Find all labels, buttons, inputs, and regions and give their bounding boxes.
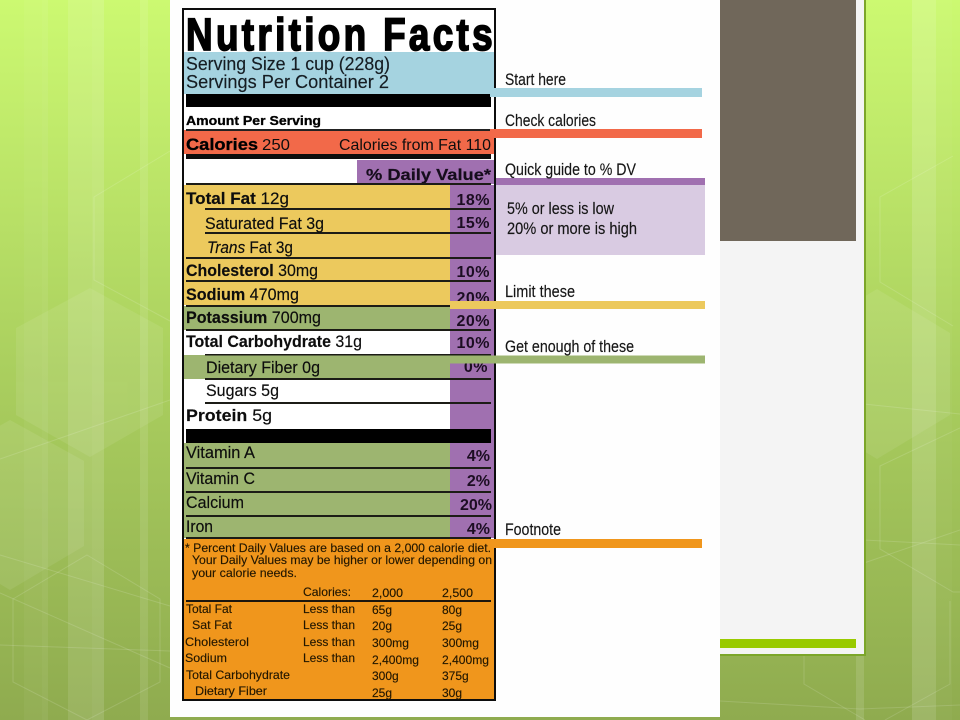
nutrient rows: Dietary Fiber 0g (206, 359, 320, 377)
callout: get enough of these (450, 337, 705, 364)
calories band: Calories from Fat 110 (339, 137, 491, 154)
percent values column: 10% (456, 264, 490, 281)
percent daily value header (357, 160, 494, 184)
percent values column: 0% (464, 359, 488, 376)
black divider bar lower (186, 429, 491, 443)
callout: start here (490, 70, 702, 97)
footnote block: Sodium (185, 651, 227, 665)
content panel (170, 0, 866, 656)
callout: check calories: Check calories (505, 111, 596, 130)
callout: footnote: Footnote (505, 520, 561, 539)
percent values column: 10% (456, 335, 490, 352)
percent values column: 20% (456, 290, 490, 307)
percent values column (456, 192, 492, 538)
nutrient rows: Protein 5g (186, 407, 272, 425)
footnote block: 2,400mg (442, 653, 489, 667)
nutrient rows: Trans Fat 3g (207, 239, 293, 257)
footnote block: 300mg (442, 636, 479, 650)
serving information band (184, 52, 494, 94)
nutrient colour bands (184, 185, 494, 538)
footnote block: * Percent Daily Values are based on a 2,000 calorie diet. (185, 541, 491, 555)
percent values column: 20% (460, 497, 492, 514)
nutrient rows: Total Fat 12g (186, 190, 289, 208)
percent values column: 20% (456, 313, 490, 330)
callout: footnote (494, 520, 702, 548)
footnote block: 300g (372, 669, 399, 683)
nutrient rows: Iron (186, 518, 213, 536)
brown title block (720, 0, 856, 241)
nutrient rows: Cholesterol 30mg (186, 262, 318, 280)
nutrient rows: Saturated Fat 3g (205, 215, 324, 233)
footnote block: 25g (372, 686, 392, 700)
footnote block: Dietary Fiber (195, 684, 267, 698)
footnote block: 300mg (372, 636, 409, 650)
footnote block: 2,500 (442, 586, 473, 600)
nutrient rows: Calcium (186, 494, 244, 512)
percent values column: 15% (456, 215, 490, 232)
serving information band: Servings Per Container 2 (186, 72, 389, 92)
nutrient rows: Total Carbohydrate 31g (186, 333, 362, 351)
calories band: 250 (262, 137, 290, 154)
green accent bar (720, 639, 856, 648)
amount per serving heading: Amount Per Serving (186, 114, 321, 128)
nutrient rows (186, 190, 362, 536)
footnote block: Your Daily Values may be higher or lower depending on (192, 553, 492, 567)
percent values column: 4% (467, 521, 490, 538)
callout: limit these (450, 282, 705, 309)
row rules (186, 183, 491, 539)
calories band: Calories (186, 136, 258, 154)
footnote block: Less than (303, 651, 355, 665)
footnote block: 375g (442, 669, 469, 683)
footnote block: Less than (303, 618, 355, 632)
footnote block: 30g (442, 686, 462, 700)
footnote block: 2,000 (372, 586, 403, 600)
nutrient rows: Vitamin A (186, 444, 255, 462)
footnote block: Cholesterol (185, 635, 249, 649)
percent values column: 2% (467, 473, 490, 490)
callout: quick guide to daily value: 20% or more is high (507, 219, 637, 238)
nutrient rows: Sugars 5g (206, 382, 279, 400)
calories band (184, 129, 494, 159)
footnote block: Total Carbohydrate (186, 668, 290, 682)
callout: start here: Start here (505, 70, 566, 89)
footnote block: your calorie needs. (192, 566, 297, 580)
percent values column: 4% (467, 448, 490, 465)
footnote block: Calories: (303, 585, 351, 599)
title: Nutrition Facts: Nutrition Facts (186, 10, 493, 60)
footnote block (184, 539, 494, 700)
black divider bar (186, 94, 491, 107)
footnote block: Sat Fat (192, 618, 233, 632)
nutrition facts label (183, 9, 705, 700)
callout: quick guide to daily value (496, 160, 705, 255)
footnote block: 2,400mg (372, 653, 419, 667)
footnote block: Total Fat (186, 602, 233, 616)
label outline (183, 9, 495, 700)
footnote block: 65g (372, 603, 392, 617)
footnote block: 25g (442, 619, 462, 633)
footnote block: 20g (372, 619, 392, 633)
footnote block: Less than (303, 635, 355, 649)
percent values column: 18% (456, 192, 490, 209)
nutrient rows: Potassium 700mg (186, 309, 321, 327)
footnote block: Less than (303, 602, 355, 616)
nutrient rows: Vitamin C (186, 470, 255, 488)
nutrient rows: Sodium 470mg (186, 286, 299, 304)
callout: check calories (490, 111, 702, 138)
white nutrition image background (170, 0, 720, 717)
callout: quick guide to daily value: Quick guide to % DV (505, 160, 637, 179)
callout: quick guide to daily value: 5% or less is low (507, 199, 615, 218)
callout: limit these: Limit these (505, 282, 575, 301)
footnote block: 80g (442, 603, 462, 617)
serving information band: Serving Size 1 cup (228g) (186, 54, 390, 74)
percent daily value header: % Daily Value* (366, 167, 492, 184)
callout: get enough of these: Get enough of these (505, 337, 634, 356)
